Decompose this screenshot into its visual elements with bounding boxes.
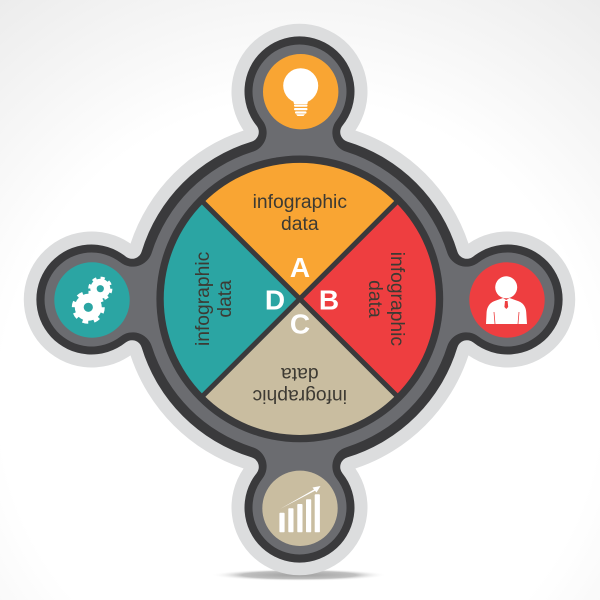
icon: person xyxy=(469,262,545,338)
text: segment D: infographic xyxy=(193,252,214,346)
segment D: teal xyxy=(164,203,300,395)
text: segment D: data xyxy=(215,280,236,318)
letter A: A xyxy=(290,252,310,283)
segment B: red xyxy=(300,203,436,395)
text: segment C: data xyxy=(281,363,319,384)
tan disc xyxy=(262,471,338,546)
ground shadow xyxy=(211,569,387,581)
dark outline silhouette xyxy=(36,36,563,563)
orange disc xyxy=(263,54,338,129)
letter D: D xyxy=(265,284,285,316)
text: segment B: data xyxy=(364,280,385,318)
letter C: C xyxy=(290,308,310,340)
pie backing ring xyxy=(156,156,443,442)
segment A: orange xyxy=(204,163,396,299)
segment C: tan xyxy=(204,299,396,435)
text: segment A: infographic xyxy=(253,192,347,213)
icon: growth chart xyxy=(262,471,338,546)
gray body silhouette xyxy=(45,45,554,554)
text: segment B: infographic xyxy=(386,252,407,346)
text: segment A: data xyxy=(281,214,319,235)
segment dividers xyxy=(200,199,400,399)
icon: gears xyxy=(54,262,130,338)
icon: light bulb xyxy=(263,54,338,129)
pie chart xyxy=(156,156,443,442)
text: segment C: infographic xyxy=(253,385,347,406)
letter B: B xyxy=(319,284,339,316)
red disc xyxy=(469,262,545,338)
teal disc xyxy=(54,262,130,338)
